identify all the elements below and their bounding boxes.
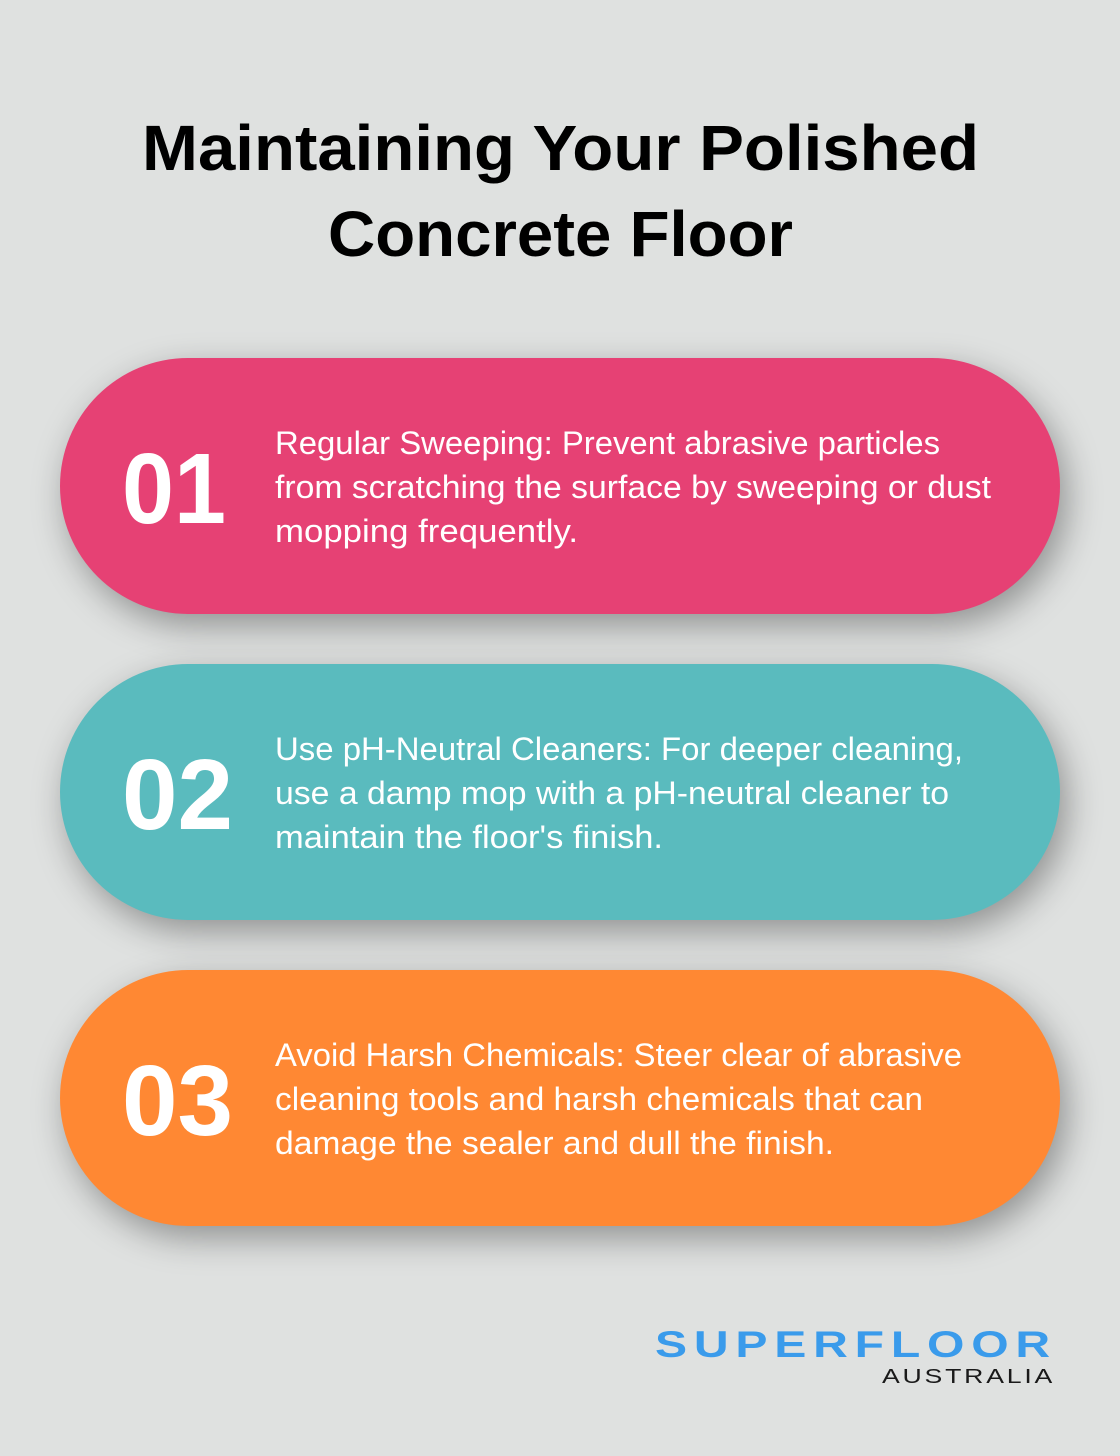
- text: step 01: mopping frequently.: [275, 513, 578, 549]
- text: step 01: from scratching the surface by sweeping or dust: [275, 469, 991, 505]
- text: step 02: Use pH-Neutral Cleaners: For deeper cleaning,: [275, 731, 963, 767]
- text: step 01: Regular Sweeping: Prevent abrasive particles: [275, 425, 940, 461]
- pill background: step 01: [60, 358, 1060, 614]
- number 02: 02: [122, 739, 233, 851]
- text: step 03: damage the sealer and dull the finish.: [275, 1125, 834, 1161]
- pill background: step 03: [60, 970, 1060, 1226]
- text: step 03: Avoid Harsh Chemicals: Steer clear of abrasive: [275, 1037, 962, 1073]
- text: step 02: maintain the floor's finish.: [275, 819, 663, 855]
- panel: step 02: [60, 664, 1060, 920]
- panel: step 03: [60, 970, 1060, 1226]
- panel: step 01: [60, 358, 1060, 614]
- text: step 03: cleaning tools and harsh chemicals that can: [275, 1081, 923, 1117]
- text: step 02: [275, 731, 963, 855]
- pill background: step 02: [60, 664, 1060, 920]
- title: Maintaining Your Polished: [142, 112, 979, 184]
- title: Concrete Floor: [328, 198, 793, 270]
- text: step 02: use a damp mop with a pH-neutral cleaner to: [275, 775, 949, 811]
- logo: Superfloor Australia: SUPERFLOOR: [655, 1324, 1050, 1366]
- text: step 03: [275, 1037, 962, 1161]
- title: [142, 112, 979, 270]
- number 01: 01: [122, 433, 226, 545]
- logo: Superfloor Australia: [655, 1324, 1052, 1388]
- number 03: 03: [122, 1045, 233, 1157]
- text: step 01: [275, 425, 991, 549]
- logo: Superfloor Australia: AUSTRALIA: [882, 1365, 1052, 1388]
